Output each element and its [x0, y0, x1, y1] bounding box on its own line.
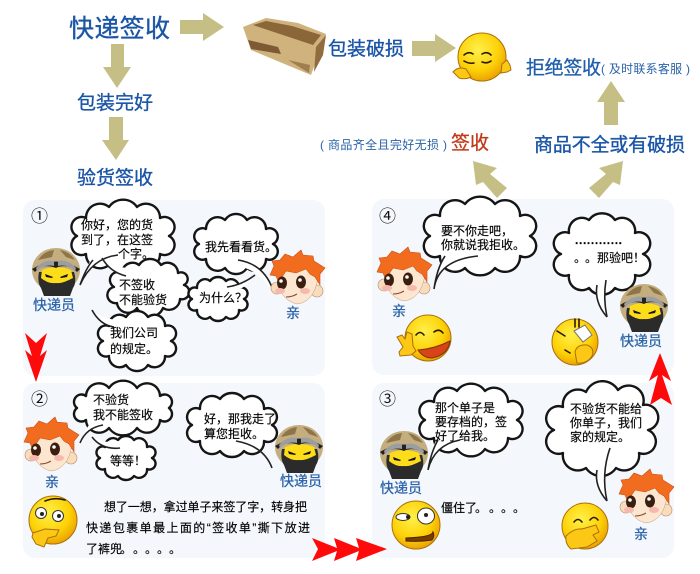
story text: 快递包裹单最上面的“签收单”撕下放进 — [86, 520, 310, 535]
speech bubble: greeting: 到了，在这签 — [81, 232, 153, 247]
speech bubble: refuse threat — [424, 197, 536, 289]
speech bubble: no slip rule: 家的规定。 — [570, 429, 630, 444]
icon: damaged cardboard box — [243, 18, 326, 75]
speech bubble: ok inspect — [554, 213, 650, 317]
label: customer: 亲 — [286, 305, 300, 321]
arrow: red down step 1 to 2 — [25, 333, 47, 382]
icon: fist smiley — [552, 319, 598, 365]
number 1: ① — [31, 207, 48, 226]
speech bubble: greeting — [71, 200, 175, 285]
number 4: ④ — [379, 207, 396, 226]
arrow: down to inspection — [102, 117, 129, 160]
speech bubble: cannot inspect: 不能验货 — [119, 292, 167, 307]
heading: 拒绝签收: 拒绝签收 — [526, 57, 601, 79]
number 3: ③ — [379, 390, 396, 409]
label: 商品不全或有破损: 商品不全或有破损 — [534, 134, 685, 156]
speech bubble: archive slip: 好了给我。 — [435, 429, 495, 443]
panel: step 3 background — [372, 383, 674, 558]
heading: 快递签收: 快递签收 — [69, 15, 170, 43]
step 1 comic — [31, 200, 325, 371]
arrow: up to refuse — [597, 81, 625, 125]
step 2 comic — [24, 381, 323, 556]
number 2: ② — [31, 390, 48, 409]
label: courier: 快递员 — [280, 473, 322, 489]
label: customer: 亲 — [45, 474, 59, 490]
label: courier: 快递员 — [380, 480, 422, 496]
speech bubble: look first — [194, 214, 278, 290]
arrow: up-right to incomplete — [589, 161, 623, 198]
label: 包装破损: 包装破损 — [328, 38, 404, 60]
speech bubble: ok inspect: ............ — [575, 233, 622, 247]
arrow: up-left to sign — [473, 161, 507, 198]
speech bubble: no slip rule: 你单子，我们 — [570, 415, 642, 430]
step 3 comic — [379, 381, 674, 549]
speech bubble: must inspect — [74, 381, 172, 443]
panel: step 4 background — [372, 199, 674, 375]
icon: customer boy — [270, 250, 325, 304]
arrow: red right step 2 to 3 — [312, 538, 387, 561]
icon: customer boy — [377, 247, 432, 301]
label: courier: 快递员 — [33, 297, 75, 313]
panel: step 1 background — [23, 200, 325, 376]
speech bubble: company rule: 我们公司 — [110, 325, 158, 340]
speech bubble: cannot inspect: 不签收 — [119, 277, 155, 292]
icon: stunned smiley — [392, 501, 440, 549]
arrow: to refuse face — [412, 34, 456, 62]
speech bubble: ok inspect: 。。那验吧！ — [574, 250, 645, 265]
speech bubble: archive slip: 要存档的，签 — [435, 414, 507, 429]
icon: customer boy — [619, 469, 674, 523]
label: 签收 red: 签收 — [451, 132, 489, 154]
speech bubble: wait — [92, 436, 156, 480]
label: 验货签收: 验货签收 — [77, 167, 153, 189]
icon: courier — [275, 425, 323, 473]
arrow: red up step 3 to 4 — [649, 353, 672, 405]
speech bubble: no slip rule — [546, 381, 658, 501]
speech bubble: refuse threat: 要不你走吧， — [441, 224, 513, 238]
story text: 了裤兜。。。。。 — [86, 541, 181, 556]
speech bubble: will report refusal: 好，那我走了 — [204, 412, 276, 426]
speech bubble: refuse threat: 你就说我拒收。 — [441, 237, 525, 252]
note: goods complete: ( 商品齐全且完好无损 ) — [320, 137, 447, 152]
label: customer: 亲 — [392, 303, 406, 319]
icon: customer boy — [24, 417, 79, 471]
story text — [86, 499, 310, 556]
speech bubble: will report refusal — [187, 393, 277, 468]
speech bubble: look first: 我先看看货。 — [205, 239, 277, 254]
speech bubble: company rule — [92, 310, 176, 371]
label: 包装完好: 包装完好 — [77, 92, 153, 114]
arrow: to damaged box — [180, 13, 224, 41]
icon: thinking smiley — [29, 496, 77, 547]
arrow: down to intact package — [103, 44, 131, 88]
speech bubble: archive slip — [419, 384, 523, 470]
icon: courier — [620, 284, 668, 332]
step 4 comic — [377, 197, 668, 365]
speech bubble: wait: 等等！ — [110, 454, 146, 468]
text: stunned: 僵住了。。。。 — [441, 501, 525, 515]
note: contact service: ( 及时联系客服 ) — [601, 61, 690, 76]
speech bubble: archive slip: 那个单子是 — [435, 401, 495, 415]
speech bubble: will report refusal: 算您拒收。 — [204, 426, 264, 441]
icon: courier — [32, 248, 80, 296]
panel: step 2 background — [23, 383, 325, 558]
speech bubble: why — [188, 275, 255, 321]
story text: 想了一想，拿过单子来签了字，转身把 — [104, 499, 307, 514]
icon: sad smiley — [453, 33, 511, 81]
speech bubble: no slip rule: 不验货不能给 — [570, 401, 642, 416]
speech bubble: must inspect: 我不能签收 — [93, 407, 153, 422]
label: customer: 亲 — [634, 526, 648, 542]
speech bubble: company rule: 的规定。 — [110, 341, 158, 356]
speech bubble: greeting: 你好，您的货 — [81, 217, 153, 232]
speech bubble: greeting: 个字。 — [118, 246, 154, 261]
speech bubble: why: 为什么？ — [199, 291, 247, 305]
icon: courier — [380, 431, 428, 479]
speech bubble: cannot inspect — [102, 258, 189, 317]
icon: mouth-covering smiley — [562, 503, 608, 549]
icon: laughing smiley — [397, 315, 451, 361]
speech bubble: must inspect: 不验货 — [93, 392, 129, 407]
label: courier: 快递员 — [620, 333, 662, 349]
